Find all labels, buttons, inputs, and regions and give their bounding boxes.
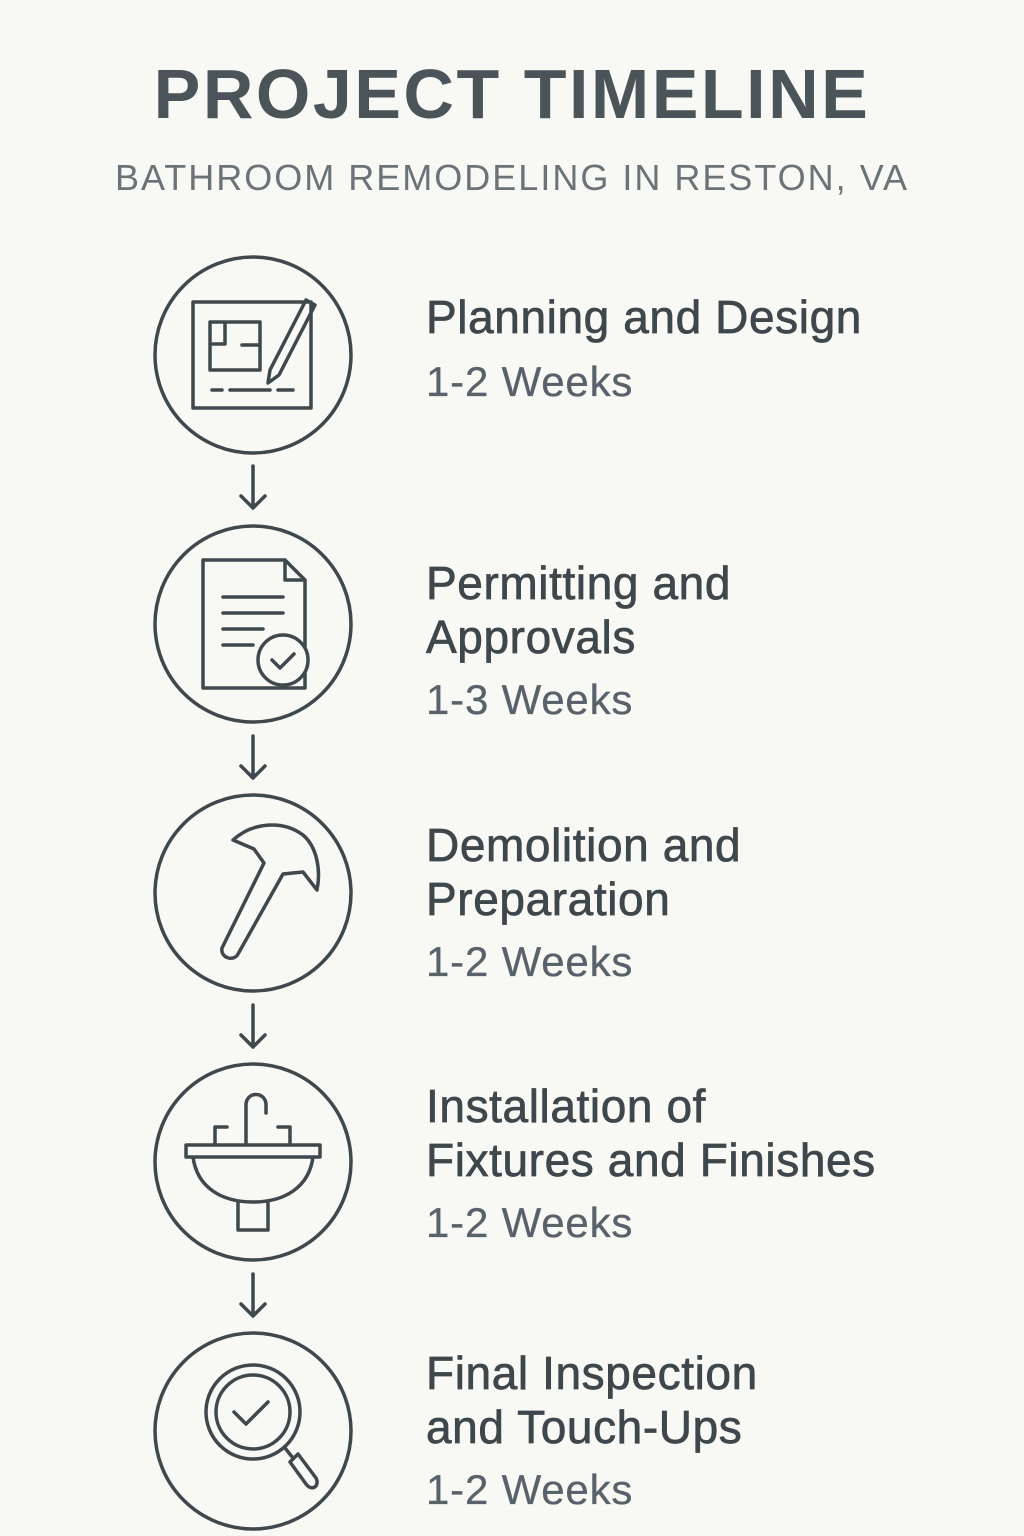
icon: permit <box>155 526 351 722</box>
subtitle: BATHROOM REMODELING IN RESTON, VA <box>115 157 909 198</box>
step 5 text: Final Inspection <box>426 1347 758 1399</box>
arrow <box>241 736 265 778</box>
step 4 text: Fixtures and Finishes <box>426 1134 876 1186</box>
icon: inspection <box>155 1333 351 1529</box>
step 1 text: 1-2 Weeks <box>426 358 633 405</box>
step 4 text <box>426 1080 876 1246</box>
step 2 text: Approvals <box>426 611 636 663</box>
step 2 text: Permitting and <box>426 557 731 609</box>
icon: sink <box>155 1064 351 1260</box>
arrow <box>241 1005 265 1047</box>
arrow <box>241 1274 265 1316</box>
step 2 text <box>426 557 731 723</box>
step 3 text: Preparation <box>426 873 670 925</box>
title: PROJECT TIMELINE <box>154 55 870 133</box>
step 5 text <box>426 1347 758 1513</box>
arrow <box>241 466 265 508</box>
icon: hammer <box>155 795 351 991</box>
step 3 text: Demolition and <box>426 819 741 871</box>
step 3 text <box>426 819 741 985</box>
step 4 text: Installation of <box>426 1080 706 1132</box>
step 4 text: 1-2 Weeks <box>426 1199 633 1246</box>
step 1 text: Planning and Design <box>426 291 862 343</box>
step 5 text: and Touch-Ups <box>426 1401 742 1453</box>
step 5 text: 1-2 Weeks <box>426 1466 633 1513</box>
step 1 text <box>426 291 862 405</box>
step 2 text: 1-3 Weeks <box>426 676 633 723</box>
icon: planning <box>155 257 351 453</box>
step 3 text: 1-2 Weeks <box>426 938 633 985</box>
